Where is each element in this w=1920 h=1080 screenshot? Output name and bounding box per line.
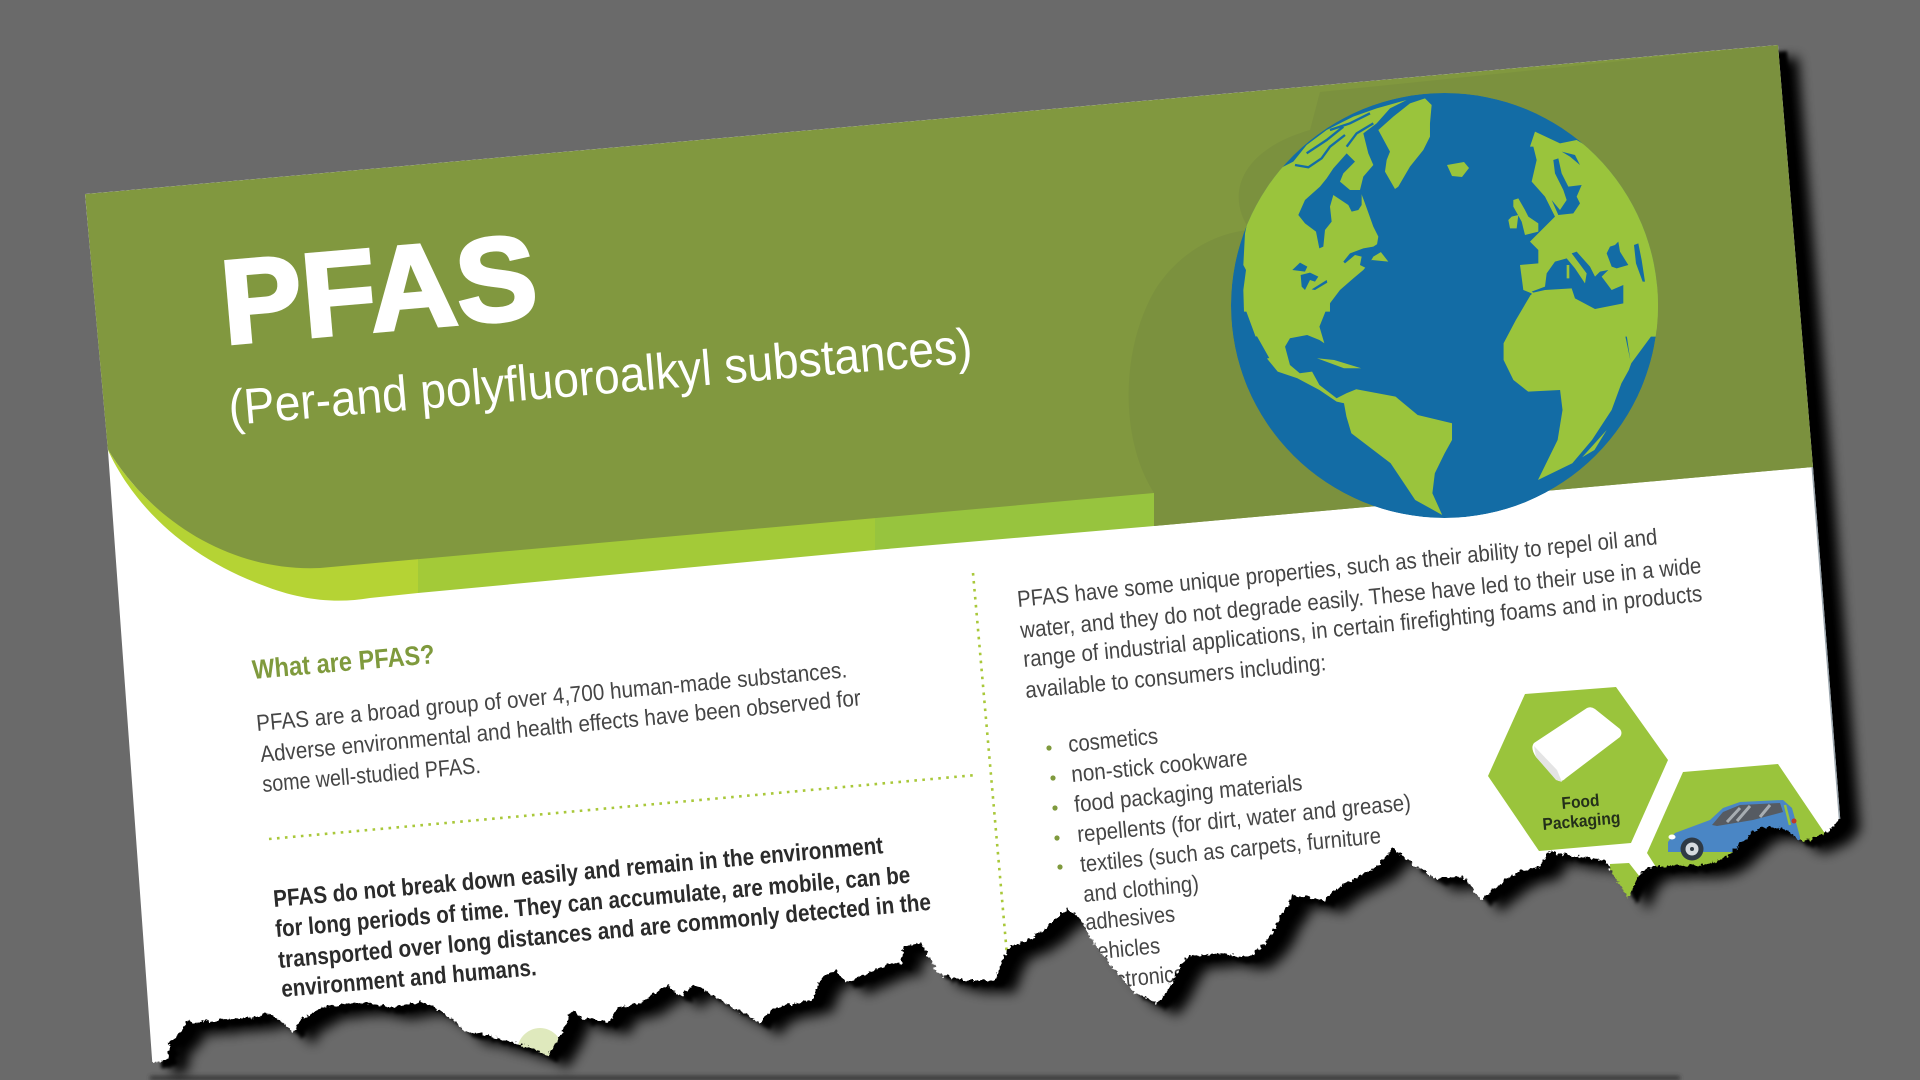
list items: adhesives [1084, 900, 1176, 935]
header tonal circles [1129, 45, 1813, 526]
accent band middle [418, 510, 875, 593]
hexagon fragment [1610, 863, 1640, 905]
subtitle: (Per-and polyfluoroalkyl substances) [226, 318, 974, 436]
text block: definition [257, 666, 860, 792]
accent band left [107, 448, 418, 601]
text block: definition: some well-studied PFAS. [261, 752, 482, 797]
list: consumer products [1046, 722, 1412, 995]
list items: food packaging materials [1073, 769, 1303, 817]
list items: textiles (such as carpets, furniture [1079, 822, 1382, 877]
text block: persistence statement [272, 832, 932, 1003]
list bullets [1046, 745, 1073, 988]
bottom edge shadow strip [150, 1076, 1680, 1080]
icon: food container [1532, 707, 1622, 782]
header base shape [85, 45, 1813, 568]
globe north america and greenland [1243, 98, 1432, 312]
globe iceland [1447, 162, 1469, 177]
text block: properties: water, and they do not degrade easily. These have led to their use in a wide [1018, 552, 1702, 643]
hexagon label [1542, 791, 1621, 834]
text block: persistence statement: PFAS do not break down easily and remain in the environment [272, 832, 884, 913]
panel: green header banner [85, 45, 1813, 601]
hexagon: food packaging [1488, 687, 1668, 851]
text block: definition: Adverse environmental and health effects have been observed for [259, 684, 862, 767]
text block: properties: range of industrial applications, in certain firefighting foams and in products [1022, 580, 1703, 672]
list items: repellents (for dirt, water and grease) [1076, 789, 1412, 847]
dotted divider vertical [973, 573, 1007, 955]
list items: non-stick cookware [1070, 744, 1249, 787]
list items: cosmetics [1067, 722, 1159, 757]
list items: and clothing) [1082, 870, 1200, 907]
list items: electronics [1088, 960, 1185, 995]
list items [1067, 722, 1412, 995]
heading: What are PFAS?: What are PFAS? [251, 639, 436, 685]
text block: properties: PFAS have some unique properties, such as their ability to repel oil and [1016, 523, 1658, 612]
hexagon fragment pale [517, 1028, 563, 1076]
dotted divider horizontal [269, 775, 976, 839]
text block: persistence statement: for long periods of time. They can accumulate, are mobile, can be [274, 862, 911, 943]
title: PFAS [216, 210, 542, 370]
accent band right [875, 493, 1154, 550]
hexagon: vehicles [1647, 764, 1826, 935]
globe ocean [1231, 93, 1658, 518]
hexagon label: Packaging [1542, 808, 1621, 834]
hexagon label: Food [1561, 791, 1600, 813]
globe eurasia [1508, 132, 1658, 337]
text block: persistence statement: transported over long distances and are commonly detected in the [277, 889, 932, 974]
icon: blue car [1668, 800, 1800, 860]
globe southern continents [1244, 286, 1658, 515]
text block: persistence statement: environment and humans. [280, 954, 538, 1003]
text block: definition: PFAS are a broad group of over 4,700 human-made substances. [255, 656, 848, 736]
list items: vehicles [1086, 932, 1161, 965]
text block: properties [1016, 523, 1703, 703]
text block: properties: available to consumers including: [1024, 649, 1327, 703]
icon: globe [1231, 93, 1700, 518]
